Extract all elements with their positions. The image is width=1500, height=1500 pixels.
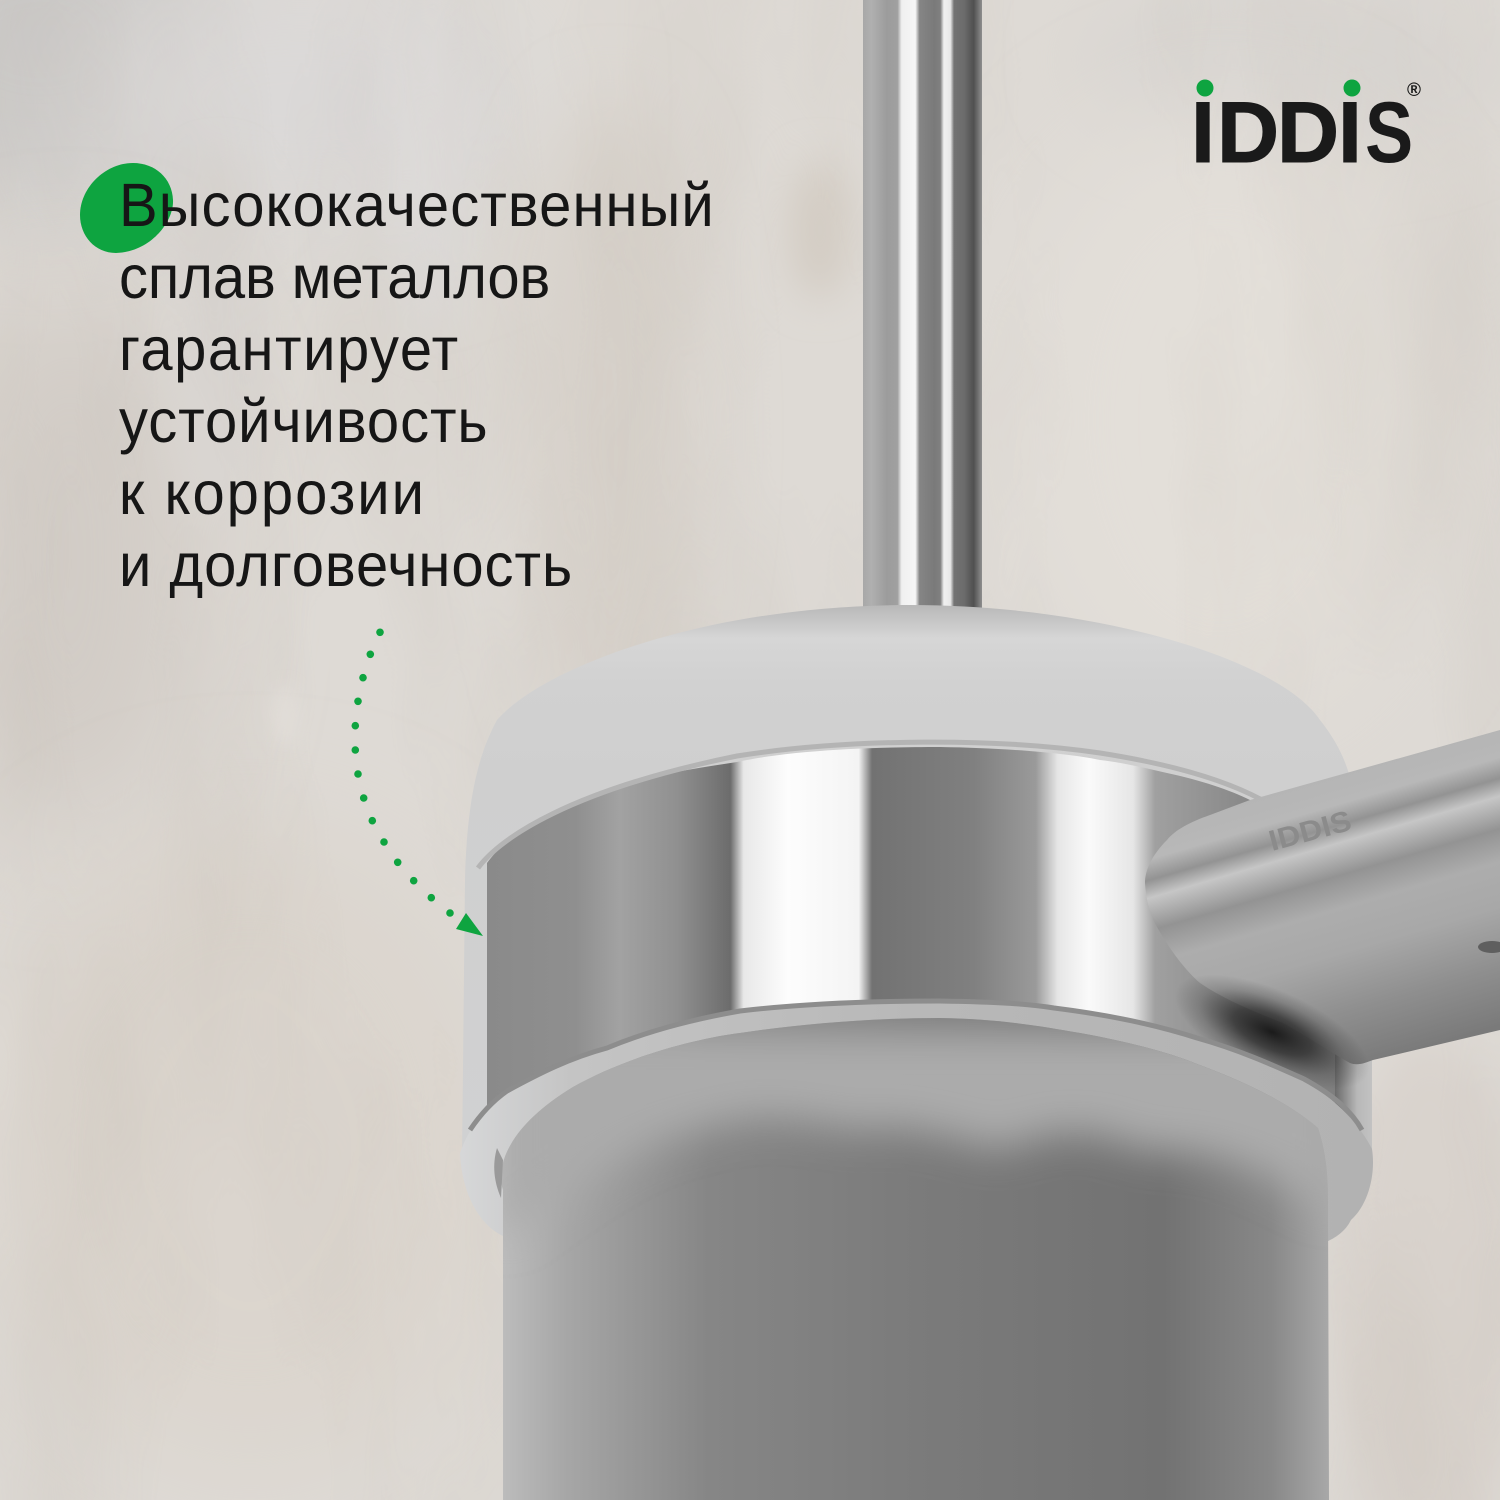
arm of holder xyxy=(1145,730,1500,1064)
ring inner shadow crescent xyxy=(494,1148,503,1198)
frosted lid xyxy=(462,605,1352,1160)
main text: к коррозии xyxy=(119,459,424,527)
main text xyxy=(119,171,714,599)
arrow head xyxy=(456,913,483,936)
logo green dot right xyxy=(1344,80,1360,96)
main text: гарантирует xyxy=(119,315,458,383)
main text: Высококачественный xyxy=(119,171,714,239)
frosted glass cylinder xyxy=(494,1018,1340,1500)
lower frosted ring xyxy=(460,1001,1373,1242)
band top rim xyxy=(478,742,1262,868)
registered mark: ® xyxy=(1407,80,1421,101)
main text: устойчивость xyxy=(119,387,488,455)
cylinder cloudy upper glow xyxy=(502,1018,1318,1207)
main text: и долговечность xyxy=(119,531,572,599)
metal rod xyxy=(863,0,982,620)
shadow under arm xyxy=(1159,951,1385,1113)
arm engraved logo: IDDIS xyxy=(1266,805,1355,858)
dotted arrow xyxy=(352,628,483,936)
green blob accent xyxy=(80,163,173,253)
metal strip right of band xyxy=(1335,1050,1372,1150)
brushed metal band xyxy=(478,742,1372,1153)
logo: IDDIS: IDDI xyxy=(1191,85,1362,181)
main text: сплав металлов xyxy=(119,243,550,311)
logo green dot left xyxy=(1196,80,1214,96)
arm screw xyxy=(1478,941,1500,953)
logo letter S: S xyxy=(1365,84,1413,180)
ring groove xyxy=(470,1001,1362,1130)
